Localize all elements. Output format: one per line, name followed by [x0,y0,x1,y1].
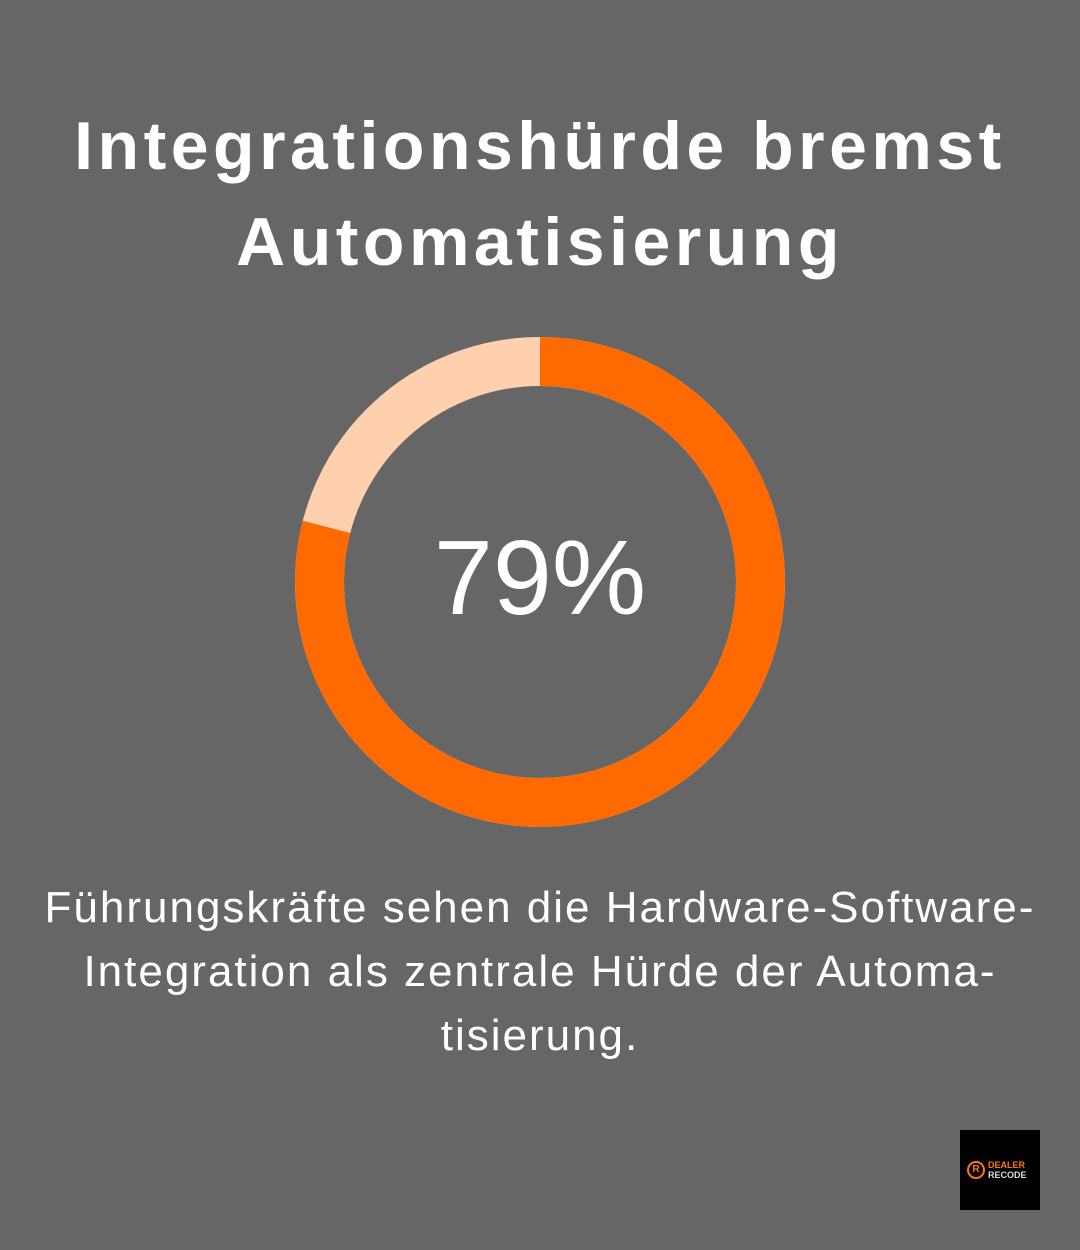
description [45,883,1035,1060]
logo: DEALER [988,1160,1025,1170]
description: tisierung. [441,1011,639,1060]
title: Automatisierung [236,204,844,280]
logo [960,1130,1040,1210]
logo: R [972,1164,980,1175]
title: Integrationshürde bremst [74,108,1006,184]
description: Führungskräfte sehen die Hardware-Software- [45,883,1035,932]
donut chart: 79% [434,519,646,637]
title [74,108,1006,280]
logo: RECODE [988,1170,1027,1180]
description: Integration als zentrale Hürde der Automa- [83,947,997,996]
